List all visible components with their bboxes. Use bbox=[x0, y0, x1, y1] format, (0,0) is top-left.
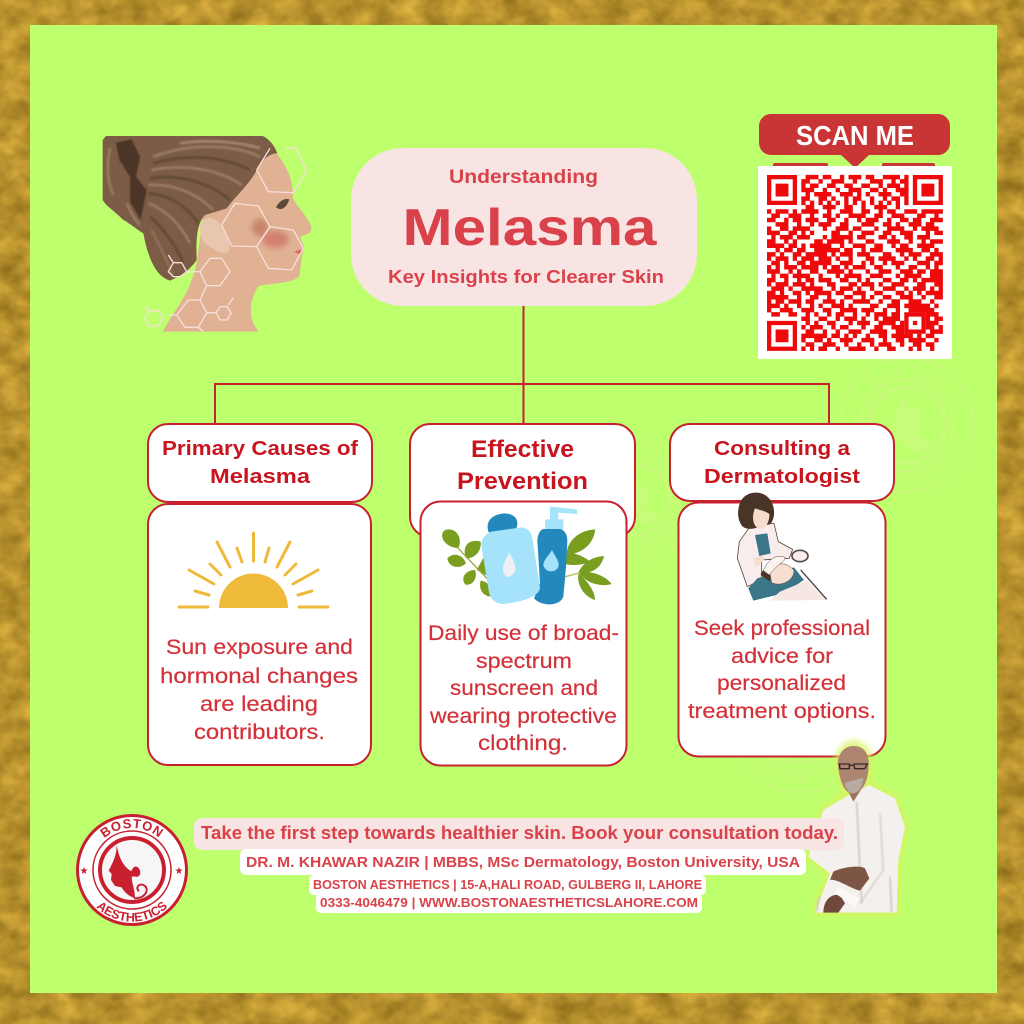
hair: bun shadow bbox=[116, 139, 147, 220]
clinic address and contact bbox=[309, 875, 706, 913]
hair bbox=[103, 136, 277, 281]
consulting text: advice for bbox=[731, 644, 833, 668]
consulting heading: Dermatologist bbox=[704, 466, 860, 488]
call to action bbox=[194, 818, 844, 850]
watermark logos bbox=[576, 358, 974, 792]
hair: strands bbox=[108, 141, 260, 275]
prevention heading: Effective bbox=[471, 436, 574, 463]
causes text: contributors. bbox=[194, 720, 325, 744]
title: melasma: Melasma bbox=[402, 199, 658, 257]
patient hair bbox=[761, 569, 772, 582]
prevention heading bbox=[457, 436, 588, 495]
patient face bbox=[769, 564, 794, 584]
doctor face bbox=[753, 508, 769, 529]
doctor hand bbox=[753, 555, 764, 567]
subtitle: Key Insights for Clearer Skin bbox=[388, 267, 664, 287]
leaves right bbox=[567, 529, 595, 555]
prevention body box bbox=[420, 502, 626, 766]
neck bbox=[845, 783, 865, 802]
doctor coat bbox=[737, 523, 793, 587]
logo: Boston Aesthetics: ★ bbox=[80, 866, 89, 877]
prevention text bbox=[428, 621, 619, 755]
prevention text: sunscreen and bbox=[450, 676, 598, 700]
beard bbox=[845, 777, 863, 793]
call to action: Take the first step towards healthier skin. Book your consultation today. bbox=[201, 823, 838, 843]
arm and hands bbox=[830, 867, 869, 891]
head bbox=[838, 746, 869, 793]
leaves left bbox=[442, 529, 612, 600]
lips bbox=[294, 249, 302, 255]
ear bbox=[200, 218, 229, 253]
blush spots bbox=[262, 231, 289, 248]
glasses bbox=[839, 764, 867, 769]
causes heading: Melasma bbox=[210, 466, 311, 488]
panel: effective prevention bbox=[410, 424, 635, 766]
portrait glow bbox=[808, 744, 905, 913]
logo: Boston Aesthetics bbox=[76, 814, 188, 926]
consulting text: treatment options. bbox=[688, 699, 876, 723]
doctor hair bbox=[738, 493, 774, 529]
dark bottle bbox=[545, 519, 563, 529]
icon: sun bbox=[179, 533, 328, 608]
prevention text: spectrum bbox=[476, 649, 572, 673]
hexagon network bbox=[145, 148, 307, 332]
consulting header box bbox=[670, 424, 894, 501]
prevention text: clothing. bbox=[478, 731, 568, 755]
icon: skincare bottles and leaves bbox=[442, 507, 612, 604]
logo: Boston Aesthetics: ★ bbox=[175, 866, 184, 877]
doctor credentials bbox=[240, 849, 806, 875]
consulting heading: Consulting a bbox=[714, 438, 851, 460]
panel: consulting a dermatologist bbox=[670, 424, 894, 756]
cap bbox=[488, 513, 517, 533]
eye bbox=[276, 199, 289, 209]
patient sheet bbox=[770, 581, 827, 601]
logo: Boston Aesthetics: BOSTON bbox=[100, 818, 164, 838]
consulting body box bbox=[678, 502, 886, 756]
doctor shirt bbox=[755, 533, 771, 556]
kurta bbox=[808, 785, 905, 913]
icon: dermatologist treating patient bbox=[737, 493, 827, 601]
title pill bbox=[351, 148, 697, 306]
scan me label: SCAN ME bbox=[796, 120, 914, 151]
prevention heading: Prevention bbox=[457, 468, 588, 495]
causes heading: Primary Causes of bbox=[162, 438, 358, 460]
prevention text: Daily use of broad- bbox=[428, 621, 619, 645]
drop on light bottle bbox=[503, 552, 515, 577]
causes text bbox=[160, 635, 358, 744]
clinic address and contact: BOSTON AESTHETICS | 15-A,HALI ROAD, GULBERG II, LAHORE bbox=[313, 878, 702, 892]
causes heading bbox=[162, 438, 358, 488]
clinic address and contact: 0333-4046479 | WWW.BOSTONAESTHETICSLAHORE.COM bbox=[320, 896, 698, 910]
consulting text: personalized bbox=[717, 671, 846, 695]
scan me badge bbox=[759, 114, 950, 169]
causes text: Sun exposure and bbox=[166, 635, 353, 659]
doctor portrait bbox=[808, 744, 905, 913]
doctor credentials: DR. M. KHAWAR NAZIR | MBBS, MSc Dermatology, Boston University, USA bbox=[246, 855, 801, 871]
drop on dark bottle bbox=[543, 550, 559, 571]
patient towel bbox=[763, 556, 785, 575]
connector lines bbox=[215, 306, 829, 424]
logo: Boston Aesthetics: AESTHETICS bbox=[96, 902, 166, 922]
illustration: woman profile with hexagons bbox=[103, 136, 311, 332]
bowl bbox=[792, 550, 808, 562]
causes text: hormonal changes bbox=[160, 664, 358, 688]
light bottle bbox=[481, 527, 540, 604]
prevention text: wearing protective bbox=[429, 704, 617, 728]
QR code bbox=[758, 166, 952, 359]
consulting heading bbox=[704, 438, 860, 488]
logo: face silhouette bbox=[109, 845, 147, 898]
causes body box bbox=[148, 504, 371, 765]
title: understanding: Understanding bbox=[449, 167, 598, 188]
causes header box bbox=[148, 424, 372, 502]
skin: face and neck bbox=[163, 153, 311, 332]
panel: primary causes bbox=[148, 424, 372, 765]
causes text: are leading bbox=[200, 692, 318, 716]
prevention header box bbox=[410, 424, 635, 537]
consulting text: Seek professional bbox=[694, 616, 870, 640]
patient shirt bbox=[748, 567, 804, 601]
consulting text bbox=[688, 616, 876, 723]
